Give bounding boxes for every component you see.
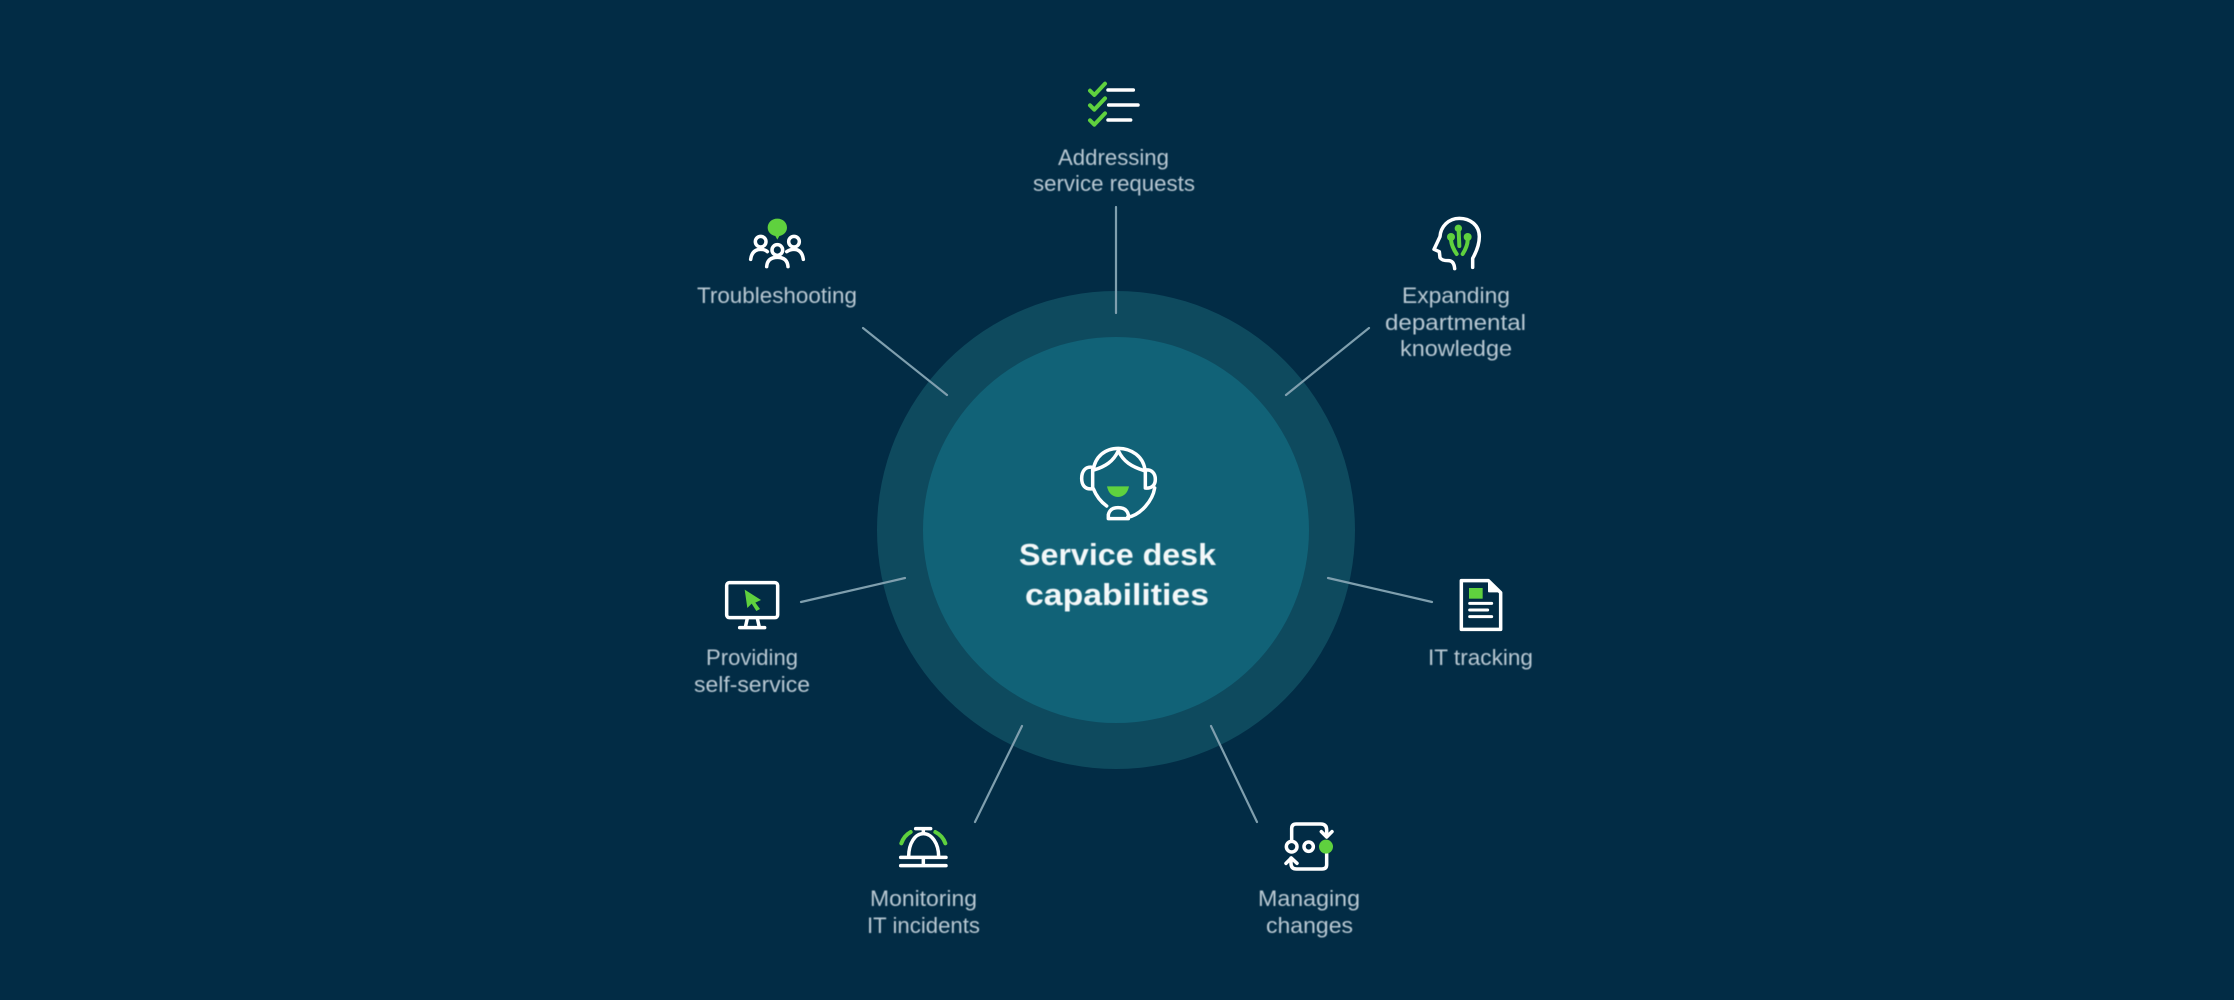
label: knowledge	[1400, 336, 1512, 361]
inner circle	[923, 337, 1309, 723]
label: Addressing	[1058, 145, 1169, 170]
label	[1033, 145, 1195, 196]
item: monitoring IT incidents	[867, 829, 980, 938]
connector: troubleshooting	[863, 328, 947, 395]
label: Expanding	[1402, 283, 1510, 308]
label: Troubleshooting	[697, 283, 857, 308]
label: service requests	[1033, 171, 1195, 196]
connector: departmental knowledge	[1286, 328, 1369, 395]
label	[1385, 283, 1526, 361]
item: IT tracking	[1428, 581, 1533, 670]
label: IT tracking	[1428, 645, 1533, 670]
label: Providing	[706, 645, 798, 670]
icon: head with network	[1434, 218, 1479, 269]
connector: IT incidents	[975, 726, 1022, 822]
icon: headset agent	[1082, 448, 1155, 519]
outer ring	[877, 291, 1355, 769]
icon: team with speech bubble	[751, 219, 803, 267]
label: Monitoring	[870, 886, 977, 911]
label	[867, 886, 980, 938]
icon: change cycle	[1286, 824, 1333, 869]
icon: service bell	[901, 829, 946, 866]
label	[1258, 886, 1360, 938]
icon: monitor with cursor	[727, 583, 778, 628]
item: expanding departmental knowledge	[1385, 218, 1526, 361]
title: capabilities	[1025, 577, 1209, 612]
label: changes	[1266, 913, 1353, 938]
label	[694, 645, 810, 697]
label: Managing	[1258, 886, 1360, 911]
title	[1019, 537, 1217, 612]
icon: document	[1461, 581, 1501, 629]
connector: service requests	[1115, 207, 1117, 313]
icon: checklist	[1090, 84, 1138, 125]
item: managing changes	[1258, 824, 1360, 938]
item: providing self-service	[694, 583, 810, 697]
label: IT incidents	[867, 913, 980, 938]
item: addressing service requests	[1033, 84, 1195, 196]
central hub: icon and title	[1019, 448, 1217, 612]
connector: IT tracking	[1328, 578, 1432, 602]
label: self-service	[694, 672, 810, 697]
connector: self-service	[801, 578, 905, 602]
title: Service desk	[1019, 537, 1217, 572]
item: troubleshooting	[697, 219, 857, 308]
label: departmental	[1385, 310, 1526, 335]
connector: managing changes	[1211, 726, 1257, 822]
